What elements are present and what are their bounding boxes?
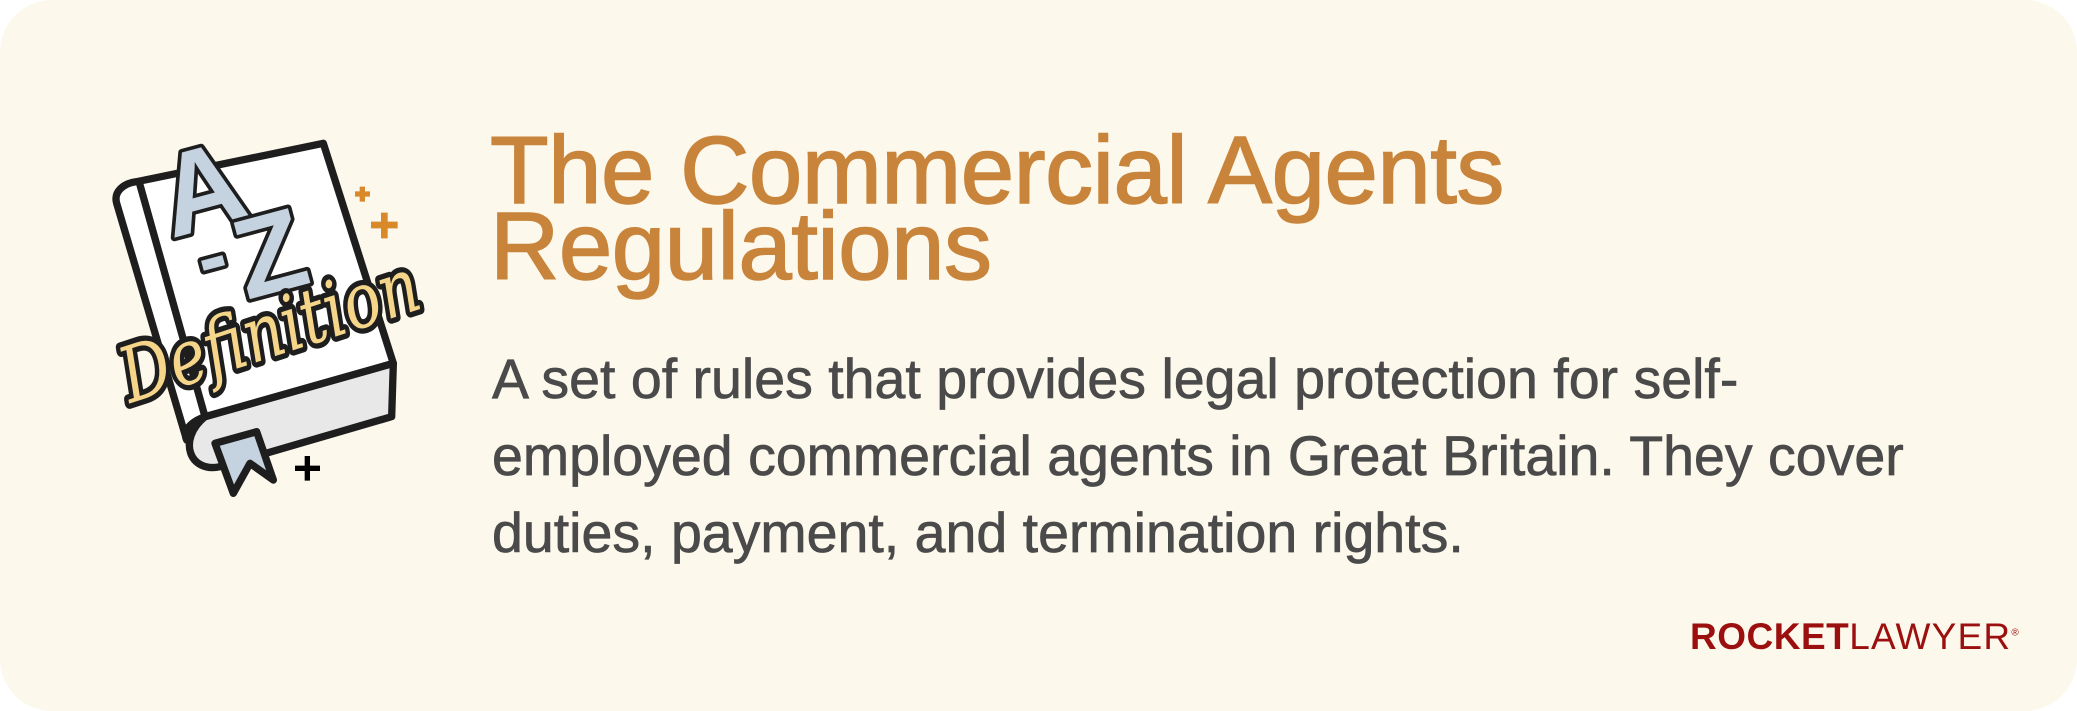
title: The Commercial Agents — [490, 117, 1504, 224]
logo: Rocket Lawyer: ROCKETLAWYER® — [1690, 616, 2020, 657]
text block: definition: employed commercial agents in Great Britain. They cover — [492, 425, 1904, 487]
title: Regulations — [490, 193, 992, 300]
icon: A-Z definition book: Z — [220, 184, 320, 324]
text block: definition: A set of rules that provides legal protection for self- — [492, 348, 1738, 410]
title — [490, 117, 1504, 300]
text block: definition — [492, 348, 1904, 564]
icon: A-Z definition book — [107, 120, 431, 497]
icon: A-Z definition book: - — [185, 206, 238, 307]
text block: definition: duties, payment, and termination rights. — [492, 502, 1464, 564]
